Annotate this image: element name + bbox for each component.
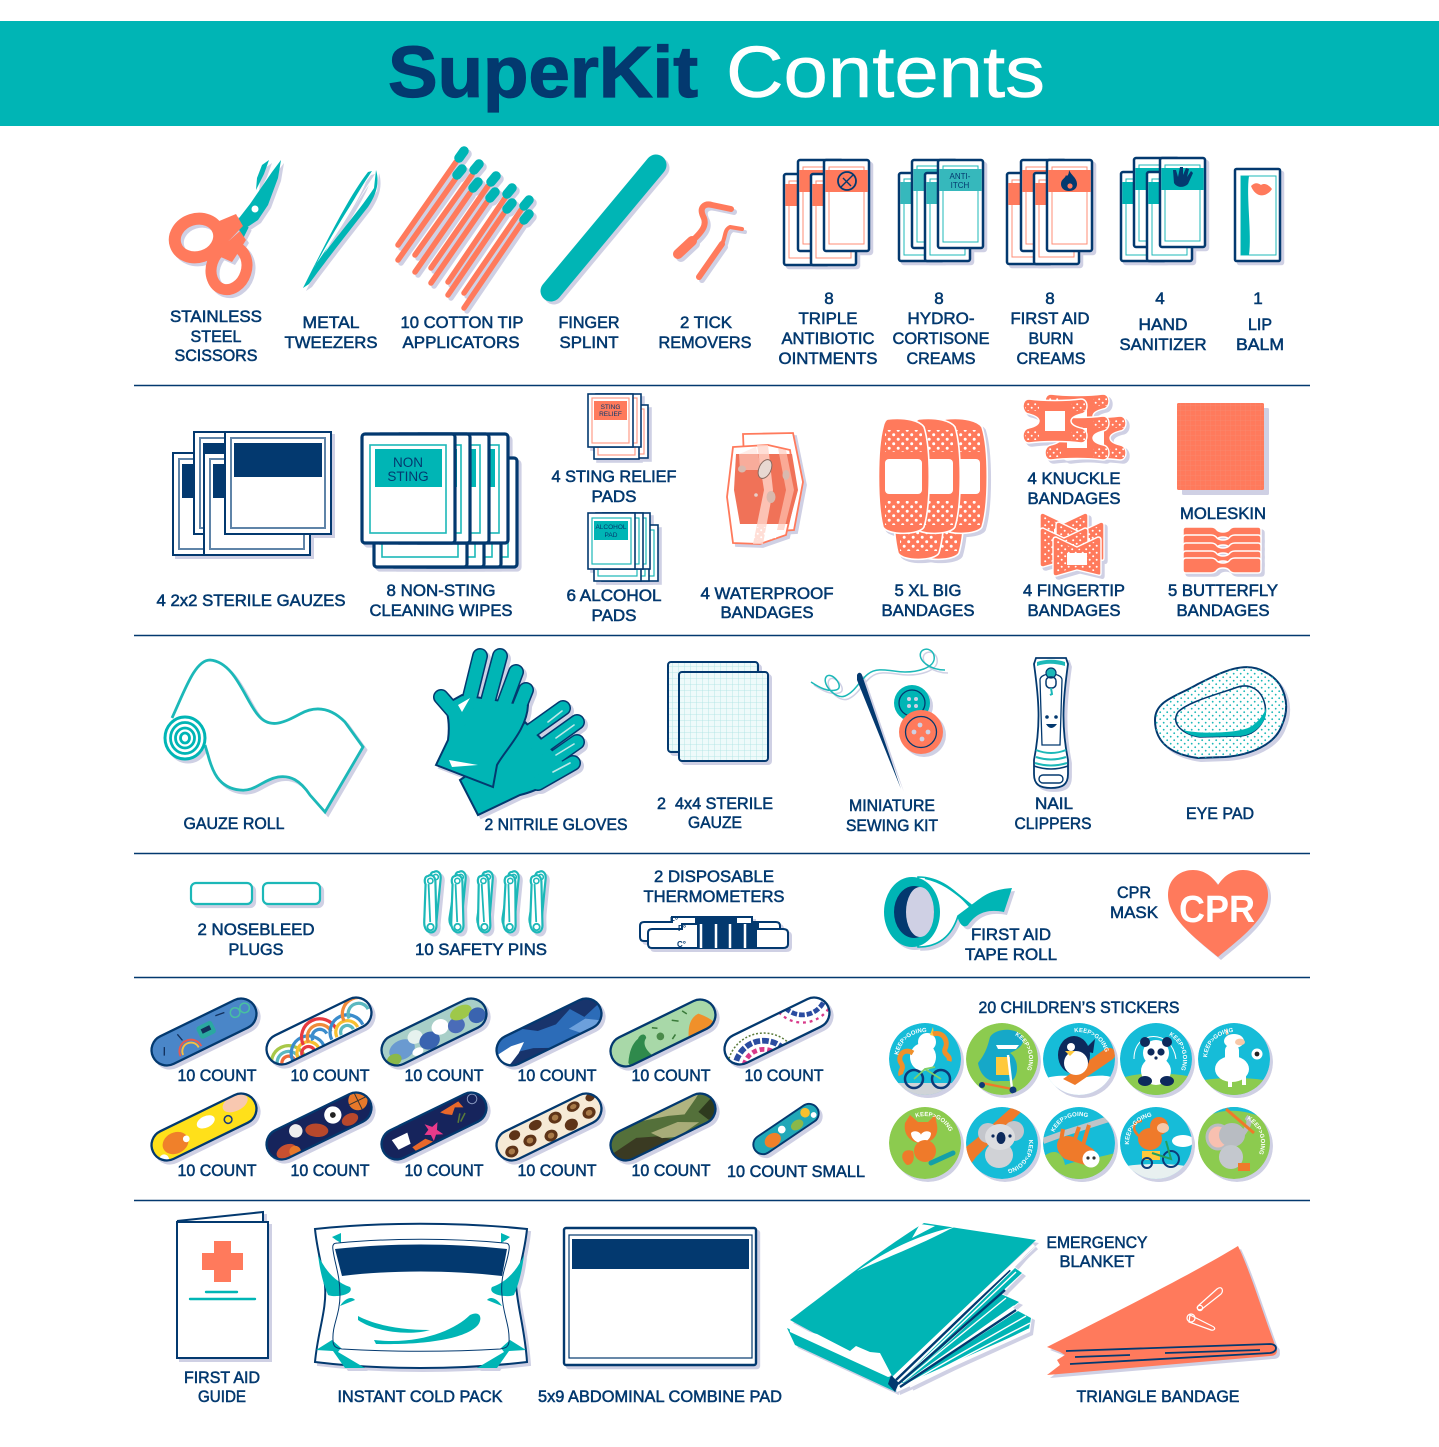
icon: hydrocortisone creams bbox=[899, 160, 983, 261]
bandage: blue camo bbox=[495, 997, 606, 1070]
labels row 2: 4 WATERPROOF bbox=[700, 584, 834, 603]
icon: sting relief pads: STING bbox=[601, 404, 620, 411]
sticker text: KEEP>GOING bbox=[1074, 1028, 1109, 1052]
labels row 1: CORTISONE bbox=[892, 329, 990, 348]
icon: tick removers bbox=[678, 204, 742, 277]
labels row 1: TWEEZERS bbox=[284, 333, 378, 352]
bandage designs bbox=[150, 996, 834, 1165]
labels row 4: PLUGS bbox=[228, 940, 284, 959]
labels row 2: 5 BUTTERFLY bbox=[1168, 581, 1278, 600]
labels: bandage counts: 10 COUNT bbox=[744, 1066, 824, 1085]
labels row 4: TAPE ROLL bbox=[965, 945, 1057, 964]
icon: miniature sewing kit bbox=[811, 649, 945, 789]
row 1: tools and creams bbox=[170, 151, 1284, 368]
labels row 1: ANTIBIOTIC bbox=[782, 329, 874, 348]
labels row 1: 1 bbox=[1253, 289, 1263, 308]
title: Contents bbox=[726, 33, 1045, 113]
labels row 2: 6 ALCOHOL bbox=[566, 586, 662, 605]
labels row 3: NAIL bbox=[1035, 794, 1073, 813]
labels row 1: METAL bbox=[302, 313, 360, 332]
icon: lip balm bbox=[1235, 169, 1280, 261]
icon: burn creams bbox=[1007, 160, 1092, 264]
labels row 2: 8 NON-STING bbox=[386, 581, 496, 600]
labels: bandage counts: 10 COUNT bbox=[290, 1066, 370, 1085]
sticker text: KEEP>GOING bbox=[1169, 1032, 1188, 1070]
icon: nosebleed plugs bbox=[191, 883, 320, 904]
row 5: decorated bandages and stickers bbox=[150, 996, 1273, 1182]
icon: emergency blanket bbox=[787, 1223, 1036, 1392]
icon: butterfly bandages bbox=[1183, 527, 1261, 573]
labels row 1: APPLICATORS bbox=[402, 333, 520, 352]
bandage: leopard bbox=[491, 1088, 607, 1166]
icon: fingertip bandages bbox=[1040, 513, 1104, 576]
labels: bandage counts bbox=[178, 998, 1180, 1181]
bandage: sports bbox=[265, 1091, 376, 1164]
labels row 1: SANITIZER bbox=[1120, 335, 1206, 354]
icon: first aid guide bbox=[177, 1212, 268, 1358]
icon: disposable thermometers bbox=[640, 916, 788, 949]
icon: disposable thermometers: C° bbox=[677, 940, 686, 949]
labels row 2: 4 STING RELIEF bbox=[552, 467, 676, 486]
bandage: yellow unicorns bbox=[150, 1092, 261, 1165]
icon: CPR mask heart: CPR bbox=[1179, 889, 1255, 931]
labels row 4: THERMOMETERS bbox=[644, 887, 784, 906]
labels: bandage counts: 10 COUNT bbox=[404, 1066, 484, 1085]
sticker: penguin on snowboard bbox=[1043, 1023, 1118, 1098]
labels row 3: MINIATURE bbox=[849, 796, 935, 815]
labels row 6: TRIANGLE BANDAGE bbox=[1076, 1387, 1240, 1406]
icon: metal tweezers bbox=[303, 170, 378, 288]
labels row 1: 4 bbox=[1155, 289, 1165, 308]
labels row 1: BALM bbox=[1236, 335, 1284, 354]
sticker text: KEEP>GOING bbox=[1124, 1112, 1152, 1144]
labels row 2: 4 FINGERTIP bbox=[1023, 581, 1125, 600]
labels: bandage counts: 10 COUNT bbox=[178, 1066, 256, 1085]
labels: bandage counts: 10 COUNT bbox=[632, 1161, 710, 1180]
labels row 1: STAINLESS bbox=[170, 307, 262, 326]
labels: bandage counts: 10 COUNT bbox=[290, 1161, 370, 1180]
labels row 1: REMOVERS bbox=[658, 333, 752, 352]
labels row 1: HAND bbox=[1138, 315, 1188, 334]
icon: sterile gauze sheets bbox=[668, 662, 768, 761]
icon: sting relief pads bbox=[588, 394, 648, 459]
labels row 2: PADS bbox=[592, 487, 636, 506]
sticker: sloth bbox=[1043, 1107, 1118, 1182]
icon: hand sanitizer bbox=[1121, 158, 1205, 261]
icon: triangle bandage bbox=[1047, 1246, 1277, 1375]
icon: gauze roll bbox=[165, 660, 363, 812]
icon: alcohol pads: PAD bbox=[605, 532, 618, 539]
sticker text: KEEP>GOING bbox=[1247, 1116, 1266, 1154]
sticker: dinosaur on scooter bbox=[966, 1023, 1041, 1098]
labels row 2: 5 XL BIG bbox=[894, 581, 962, 600]
icon: alcohol pads bbox=[588, 513, 658, 581]
bandage: mandala bbox=[723, 996, 834, 1069]
labels row 1: BURN bbox=[1028, 329, 1074, 348]
icon: triple antibiotic ointments bbox=[784, 160, 869, 265]
icon: waterproof bandages bbox=[727, 433, 803, 544]
row 6: guide, cold pack, combine pad, blanket, triangle bandage bbox=[177, 1212, 1277, 1406]
labels row 3 bbox=[184, 794, 1254, 835]
labels row 2: MOLESKIN bbox=[1180, 504, 1266, 523]
sticker text: KEEP>GOING bbox=[915, 1112, 952, 1132]
labels row 2 bbox=[156, 467, 1278, 625]
labels row 3: 2 4x4 STERILE bbox=[657, 794, 773, 813]
icon: non-sting wipes: NON bbox=[393, 455, 423, 470]
labels row 6 bbox=[184, 1233, 1240, 1406]
labels row 6: FIRST AID bbox=[184, 1368, 260, 1387]
sticker: panda bbox=[1120, 1023, 1195, 1098]
labels row 1: FIRST AID bbox=[1010, 309, 1090, 328]
labels row 1: 8 bbox=[1045, 289, 1055, 308]
icon: first aid tape roll bbox=[884, 877, 1012, 947]
labels row 6: EMERGENCY bbox=[1046, 1233, 1148, 1252]
labels: bandage counts: 10 COUNT bbox=[518, 1066, 596, 1085]
labels: bandage counts: 10 COUNT SMALL bbox=[727, 1162, 865, 1181]
labels row 2: BANDAGES bbox=[720, 603, 814, 622]
children's stickers bbox=[889, 1023, 1273, 1182]
labels row 6: BLANKET bbox=[1060, 1252, 1134, 1271]
icon: sterile gauzes bbox=[173, 432, 331, 555]
labels row 3: GAUZE ROLL bbox=[184, 814, 284, 833]
labels row 6: GUIDE bbox=[198, 1387, 246, 1406]
icon: nail clippers bbox=[1034, 658, 1068, 788]
sticker text: KEEP>GOING bbox=[1008, 1140, 1034, 1173]
sticker text: KEEP>GOING bbox=[894, 1028, 926, 1055]
labels row 4: 2 DISPOSABLE bbox=[654, 867, 774, 886]
labels row 2: 4 2x2 STERILE GAUZES bbox=[156, 591, 346, 610]
labels row 4 bbox=[198, 867, 1159, 964]
labels row 1: SPLINT bbox=[560, 333, 618, 352]
labels row 4: MASK bbox=[1110, 903, 1159, 922]
labels row 1: 8 bbox=[934, 289, 944, 308]
icon: scissors bbox=[170, 160, 281, 294]
labels row 4: 10 SAFETY PINS bbox=[415, 940, 547, 959]
bandage: tie-dye bbox=[376, 993, 492, 1071]
bandage: woodland bbox=[376, 1087, 492, 1165]
icon: finger splint bbox=[551, 165, 656, 291]
icon: nitrile gloves bbox=[436, 656, 577, 815]
labels row 2: BANDAGES bbox=[1028, 489, 1120, 508]
icon: knuckle bandages bbox=[1023, 394, 1126, 460]
labels row 1: OINTMENTS bbox=[778, 349, 878, 368]
labels row 1: 8 bbox=[824, 289, 834, 308]
labels row 4: 2 NOSEBLEED bbox=[198, 920, 314, 939]
labels row 3: CLIPPERS bbox=[1014, 814, 1092, 833]
bandage: blue kids bbox=[146, 993, 262, 1071]
icon: non-sting wipes bbox=[362, 434, 517, 567]
labels row 3: 2 NITRILE GLOVES bbox=[484, 815, 628, 834]
icon: disposable thermometers: F° bbox=[678, 924, 686, 933]
title: SuperKit bbox=[388, 33, 698, 113]
labels row 1: HYDRO- bbox=[908, 309, 974, 328]
icon: sting relief pads: RELIEF bbox=[599, 411, 622, 418]
bandage: rainbows bbox=[265, 996, 376, 1069]
bandage: small teal bbox=[750, 1100, 822, 1158]
labels row 2: BANDAGES bbox=[1028, 601, 1120, 620]
header banner bbox=[0, 21, 1439, 126]
icon: safety pins bbox=[421, 871, 546, 933]
labels row 1 bbox=[170, 289, 1284, 368]
labels row 6: 5x9 ABDOMINAL COMBINE PAD bbox=[538, 1387, 782, 1406]
icon: alcohol pads: ALCOHOL bbox=[595, 524, 627, 531]
icon: moleskin bbox=[1177, 403, 1264, 490]
icon: XL big bandages bbox=[878, 418, 987, 559]
labels row 4: FIRST AID bbox=[971, 925, 1051, 944]
labels row 1: LIP bbox=[1248, 315, 1272, 334]
icon: abdominal combine pad bbox=[564, 1228, 756, 1365]
labels row 4: CPR bbox=[1117, 883, 1151, 902]
labels row 1: 2 TICK bbox=[680, 313, 733, 332]
labels row 2: CLEANING WIPES bbox=[370, 601, 512, 620]
labels row 1: CREAMS bbox=[906, 349, 976, 368]
labels row 1: TRIPLE bbox=[798, 309, 858, 328]
labels row 1: SCISSORS bbox=[174, 346, 258, 365]
icon: eye pad bbox=[1155, 667, 1286, 758]
labels row 2: BANDAGES bbox=[1176, 601, 1270, 620]
labels: bandage counts: 10 COUNT bbox=[178, 1161, 256, 1180]
icon: disposable thermometers: F° bbox=[670, 916, 678, 925]
bandage: dinosaurs bbox=[605, 994, 721, 1072]
sticker text: KEEP>GOING bbox=[1050, 1112, 1088, 1132]
labels row 3: GAUZE bbox=[688, 813, 742, 832]
sticker: elephant bbox=[1198, 1107, 1273, 1182]
icon: cotton tip applicators bbox=[398, 151, 529, 308]
labels: bandage counts: 10 COUNT bbox=[404, 1161, 484, 1180]
sticker: fox bbox=[889, 1107, 964, 1182]
sticker: unicorn bbox=[889, 1023, 964, 1098]
labels row 3: EYE PAD bbox=[1186, 804, 1254, 823]
labels row 2: BANDAGES bbox=[882, 601, 974, 620]
labels row 1: STEEL bbox=[190, 327, 242, 346]
sticker text: KEEP>GOING bbox=[1203, 1028, 1233, 1058]
labels row 3: SEWING KIT bbox=[846, 816, 938, 835]
icon: CPR mask heart bbox=[1168, 870, 1268, 957]
labels row 2: PADS bbox=[592, 606, 636, 625]
labels row 1: FINGER bbox=[558, 313, 620, 332]
icon: hydrocortisone creams: ANTI- bbox=[950, 172, 971, 181]
icon: non-sting wipes: STING bbox=[387, 469, 429, 484]
labels row 2: 4 KNUCKLE bbox=[1028, 469, 1120, 488]
row 4: plugs, pins, thermometers, tape, CPR bbox=[191, 867, 1268, 964]
sticker text: KEEP>GOING bbox=[1015, 1032, 1034, 1070]
labels row 1: 10 COTTON TIP bbox=[400, 313, 524, 332]
row 3: gauze roll, gloves, sewing kit, clippers, eye pad bbox=[165, 649, 1286, 835]
icon: hydrocortisone creams: ITCH bbox=[951, 181, 970, 190]
labels: bandage counts: 10 COUNT bbox=[518, 1161, 596, 1180]
bandage: green camo bbox=[609, 1092, 720, 1165]
sticker: koala bbox=[966, 1107, 1041, 1182]
sticker: llama bbox=[1198, 1023, 1273, 1098]
labels row 6: INSTANT COLD PACK bbox=[338, 1387, 503, 1406]
sticker: monkey on bike bbox=[1120, 1107, 1195, 1182]
icon: instant cold pack bbox=[315, 1224, 527, 1368]
labels: bandage counts: 20 CHILDREN’S STICKERS bbox=[978, 998, 1180, 1017]
labels row 1: CREAMS bbox=[1016, 349, 1086, 368]
row 2: gauzes, wipes and bandages bbox=[156, 394, 1278, 625]
labels: bandage counts: 10 COUNT bbox=[632, 1066, 710, 1085]
